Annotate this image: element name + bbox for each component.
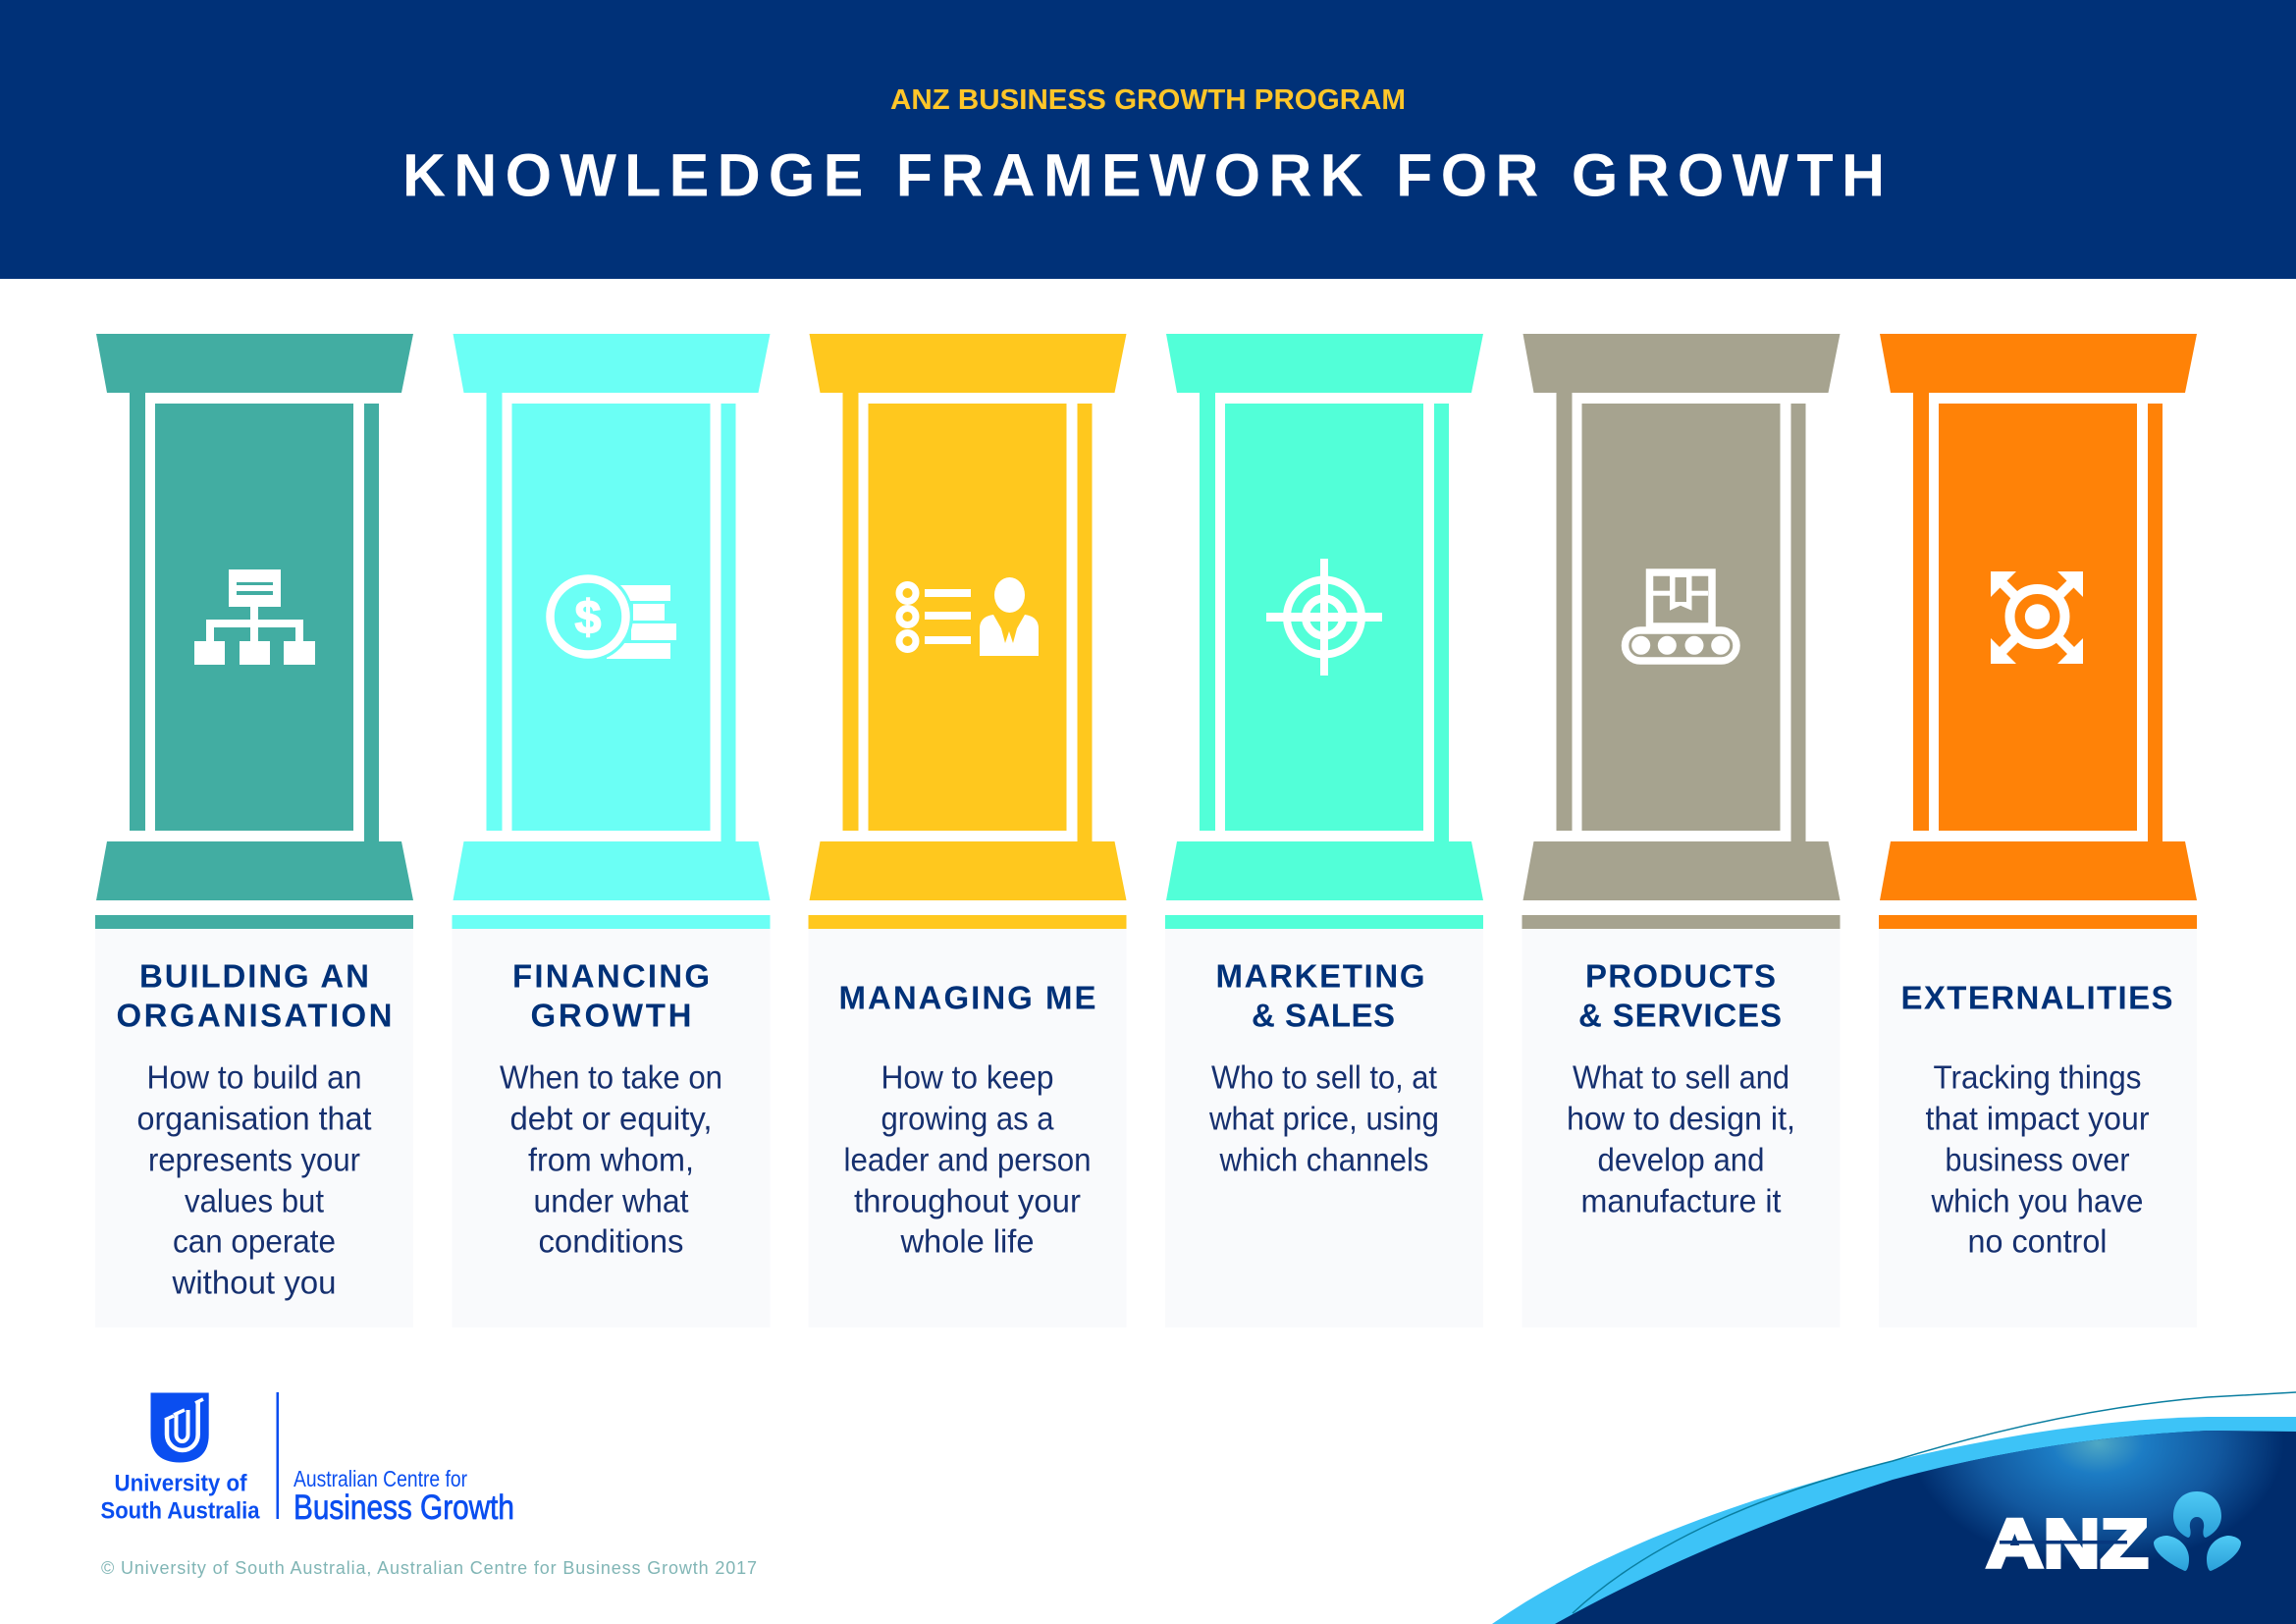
pillar (95, 334, 413, 929)
icon: coin stack: $ (575, 592, 602, 644)
body text (1926, 1058, 2150, 1259)
panel: externalities (1879, 334, 2197, 1327)
university name (100, 1471, 260, 1524)
ANZ wordmark: ANZ (1987, 1505, 2148, 1582)
university name: University of (114, 1471, 247, 1496)
heading: FINANCING (512, 958, 710, 994)
body text (844, 1058, 1092, 1259)
body text: how to design it, (1567, 1100, 1795, 1137)
pillar (1879, 334, 2197, 929)
body text: organisation that (137, 1100, 371, 1137)
body text: conditions (538, 1223, 683, 1259)
panel: financing growth (452, 334, 770, 1327)
header band (0, 0, 2296, 279)
heading: EXTERNALITIES (1900, 980, 2173, 1015)
pillar (809, 334, 1127, 929)
wordmark slit (2000, 1541, 2127, 1543)
body text: values but (185, 1182, 324, 1219)
body text: growing as a (881, 1100, 1054, 1137)
body text (1567, 1058, 1795, 1219)
heading (1215, 958, 1425, 1033)
body text (137, 1058, 371, 1300)
heading: GROWTH (530, 998, 691, 1033)
title: KNOWLEDGE FRAMEWORK FOR GROWTH (402, 141, 1885, 208)
body text: business over (1946, 1141, 2130, 1178)
body text: Tracking things (1934, 1058, 2142, 1096)
body text: under what (534, 1182, 689, 1219)
logo: Australian Centre for Business Growth (294, 1466, 514, 1527)
body text: whole life (900, 1223, 1035, 1259)
pillar (452, 334, 770, 929)
body text: which channels (1219, 1141, 1429, 1178)
body text: which you have (1931, 1182, 2144, 1219)
body text (500, 1058, 722, 1259)
logo: Australian Centre for Business Growth: Australian Centre for (294, 1466, 467, 1491)
icon: target (1266, 559, 1382, 676)
description card (809, 929, 1127, 1327)
body text (1208, 1058, 1439, 1178)
body text: Who to sell to, at (1211, 1058, 1437, 1096)
body text: How to keep (881, 1058, 1054, 1096)
heading (116, 958, 393, 1033)
body text: can operate (173, 1223, 336, 1259)
body text: When to take on (500, 1058, 722, 1096)
heading: ORGANISATION (116, 998, 393, 1033)
logo divider (277, 1392, 279, 1519)
copyright: © University of South Australia, Australian Centre for Business Growth 2017 (101, 1558, 757, 1578)
description card (1522, 929, 1840, 1327)
logo: ANZ (1987, 1491, 2241, 1582)
body text: from whom, (528, 1141, 694, 1178)
body text: How to build an (147, 1058, 361, 1096)
heading: BUILDING AN (139, 958, 369, 994)
heading (1578, 958, 1782, 1033)
body text: represents your (148, 1141, 360, 1178)
footer swoosh (1492, 1391, 2296, 1624)
body text: no control (1967, 1223, 2107, 1259)
logo: University of South Australia (100, 1392, 260, 1524)
body text: without you (171, 1265, 336, 1300)
heading: MARKETING (1215, 958, 1425, 994)
heading: MANAGING ME (838, 980, 1095, 1015)
icon: organisation chart (194, 569, 315, 665)
description card (95, 929, 413, 1327)
university name: South Australia (100, 1498, 260, 1524)
panel: managing me (809, 334, 1127, 1327)
panel: products and services (1522, 334, 1840, 1327)
icon: conveyor belt with box (1626, 572, 1736, 661)
panel: marketing and sales (1165, 334, 1483, 1327)
icon: checklist and person (899, 577, 1039, 656)
description card (1879, 929, 2197, 1327)
icon: expanding arrows around circle (1991, 571, 2083, 664)
logo: Australian Centre for Business Growth: Business Growth (294, 1489, 514, 1527)
body text: What to sell and (1573, 1058, 1789, 1096)
body text: debt or equity, (510, 1100, 713, 1137)
body text: that impact your (1926, 1100, 2150, 1137)
body text: what price, using (1208, 1100, 1439, 1137)
icon: coin stack (543, 571, 676, 662)
body text: manufacture it (1580, 1182, 1781, 1219)
heading (512, 958, 710, 1033)
subtitle: ANZ BUSINESS GROWTH PROGRAM (890, 84, 1406, 116)
heading: & SALES (1252, 998, 1395, 1033)
body text: leader and person (844, 1141, 1092, 1178)
heading: PRODUCTS (1585, 958, 1776, 994)
icon: shield (151, 1392, 209, 1463)
body text: develop and (1598, 1141, 1765, 1178)
body text: throughout your (854, 1182, 1081, 1219)
description card (1165, 929, 1483, 1327)
heading: & SERVICES (1578, 998, 1782, 1033)
description card (452, 929, 770, 1327)
pillar (1165, 334, 1483, 929)
icon: droplets (2154, 1491, 2241, 1571)
panel: building an organisation (95, 334, 413, 1327)
pillar (1522, 334, 1840, 929)
